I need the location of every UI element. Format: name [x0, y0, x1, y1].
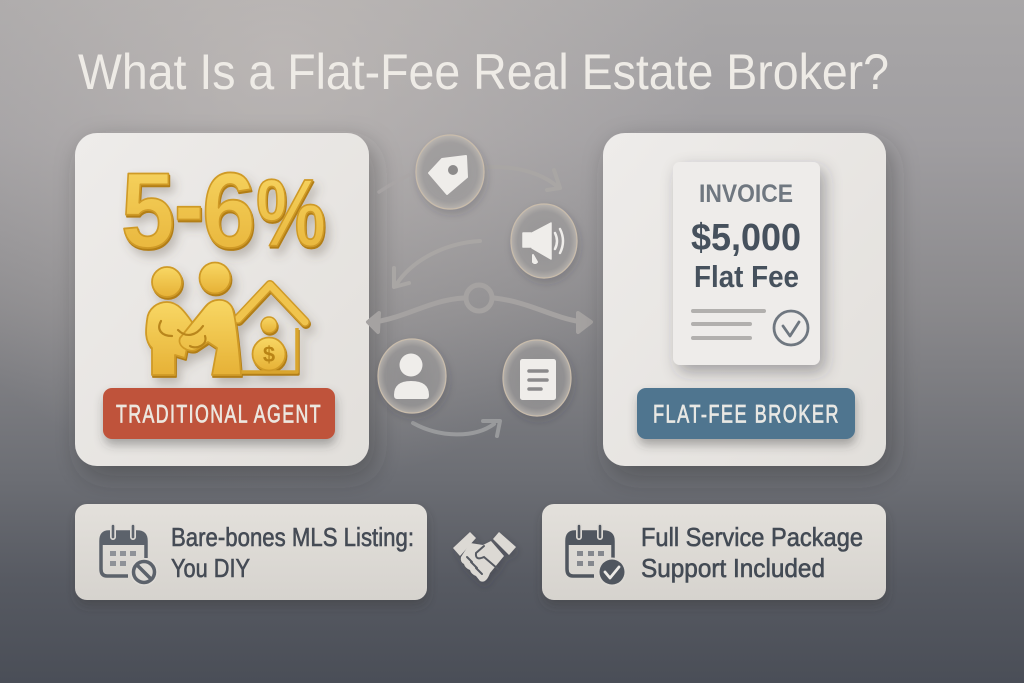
text: full service package: Support Included: [641, 553, 825, 583]
invoice document: [673, 162, 820, 365]
icon: megaphone: [511, 204, 577, 278]
icon: calendar with prohibition sign: [101, 526, 158, 586]
icon: document: [503, 340, 571, 416]
house outline: [238, 285, 305, 322]
commission percentage: 5: [121, 150, 175, 270]
icon: calendar with check mark: [567, 526, 626, 586]
hub ring: [466, 285, 492, 311]
commission percentage: %: [256, 160, 326, 267]
panel: traditional agent: [75, 133, 369, 466]
text: full service package: Full Service Package: [641, 522, 863, 552]
left person: [146, 267, 192, 375]
text: bare-bones listing: You DIY: [171, 553, 250, 583]
text: full service package: [641, 522, 863, 583]
invoice document: INVOICE: [699, 180, 793, 208]
icon: check mark: [774, 311, 808, 345]
dollar coin: [252, 338, 286, 370]
arrow: top tail: [379, 175, 409, 192]
arrow: megaphone to left: [394, 241, 480, 287]
invoice document: $5,000: [691, 217, 801, 259]
label: flat-fee broker: [637, 388, 855, 439]
clasped hand detail: [159, 321, 205, 347]
panel: flat-fee broker: [603, 133, 886, 466]
label: flat-fee broker: FLAT-FEE BROKER: [653, 400, 840, 428]
right person: [179, 262, 241, 375]
label: traditional agent: TRADITIONAL AGENT: [116, 400, 322, 428]
label: traditional agent: [103, 388, 335, 439]
arrow: tag to megaphone: [486, 167, 560, 190]
commission percentage: -: [174, 144, 204, 264]
commission percentage: 6: [202, 150, 256, 270]
arrow: person to document: [413, 421, 500, 436]
panel: bare-bones listing: [75, 504, 427, 600]
panel background: [75, 133, 369, 466]
panel background: [603, 133, 886, 466]
arrow: main left: [368, 298, 464, 332]
arrow: main right: [494, 298, 591, 332]
panel: full service package: [542, 504, 886, 600]
text: bare-bones listing: [171, 522, 414, 583]
icon: handshake: [453, 532, 516, 582]
icon: agent and client with house and coin: $: [263, 342, 275, 367]
small coin: [261, 317, 277, 333]
text: bare-bones listing: Bare-bones MLS Listing:: [171, 522, 414, 552]
invoice line items: [693, 311, 764, 338]
connector hub and curved arrows: [368, 167, 591, 436]
invoice document: Flat Fee: [694, 259, 799, 294]
icon: price tag: [416, 135, 484, 209]
icon: agent and client with house and coin: [146, 262, 305, 375]
commission percentage: [121, 144, 326, 270]
icon: person: [378, 339, 446, 413]
title: What Is a Flat-Fee Real Estate Broker?: [78, 44, 889, 100]
